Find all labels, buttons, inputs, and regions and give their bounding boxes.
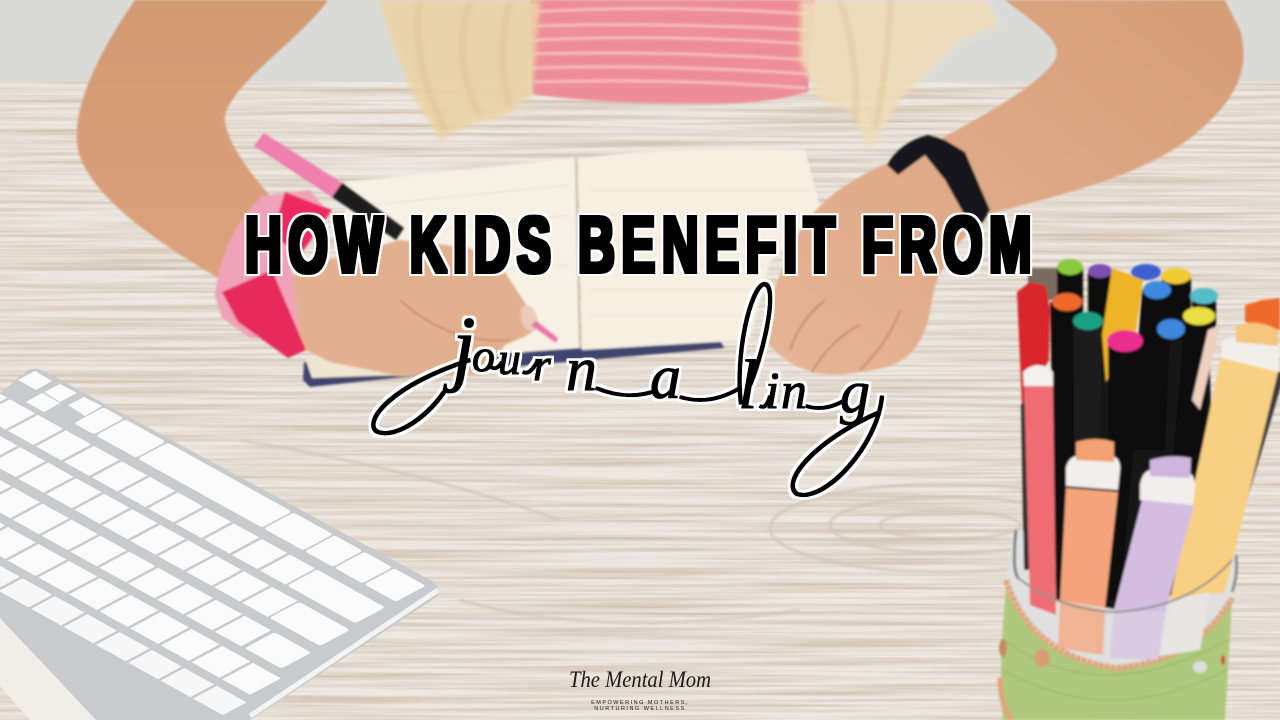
cup studs [999, 639, 1007, 657]
orange marker far right [1245, 298, 1280, 330]
journaling lettering: l [738, 347, 757, 424]
pale pen [1192, 325, 1220, 410]
cup glass rim [1018, 560, 1232, 612]
journaling lettering: g [840, 359, 870, 425]
notebook left page [345, 158, 579, 362]
swash on g [793, 396, 882, 495]
coral pen [1024, 385, 1056, 615]
logo: The Mental Mom: The Mental Mom [569, 667, 711, 692]
keyboard keys [0, 364, 445, 709]
journaling lettering: a [650, 344, 681, 412]
shirt [530, 0, 815, 104]
yellow highlighter [1170, 352, 1279, 600]
thin black pen [1215, 372, 1280, 590]
red marker [1017, 282, 1050, 405]
logo: The Mental Mom: EMPOWERING MOTHERS, [591, 700, 689, 706]
hair [378, 0, 1000, 150]
journaling lettering: o [472, 330, 495, 381]
keyboard body [0, 369, 438, 720]
marker cup [999, 259, 1280, 720]
journaling lettering: n [566, 336, 597, 404]
journaling lettering: n [781, 363, 807, 420]
wall background [0, 0, 1280, 90]
dark markers mass [1058, 330, 1215, 610]
swash on j [373, 360, 470, 433]
back markers [1028, 268, 1060, 300]
right arm and hand [765, 0, 1244, 375]
cup glass body [1006, 530, 1237, 668]
title: HOW KIDS BENEFIT FROM [245, 200, 1038, 290]
left arm [77, 0, 540, 376]
scrunchie [215, 190, 330, 340]
front marker tips [1130, 290, 1172, 450]
pink pen [254, 133, 558, 343]
keyboard arrow keys [18, 371, 102, 416]
journaling lettering: j [442, 300, 476, 394]
watch band [887, 135, 990, 225]
notebook right page [578, 149, 822, 350]
logo: The Mental Mom [569, 667, 711, 712]
logo: The Mental Mom: NURTURING WELLNESS [594, 706, 686, 712]
script subtitle: journaling [373, 284, 882, 495]
peach highlighter [1060, 488, 1118, 608]
notebook [303, 149, 822, 387]
letter connectors [490, 360, 845, 408]
keyboard [0, 364, 445, 720]
yellow flat marker [1102, 268, 1143, 382]
journaling lettering: i [765, 363, 779, 420]
journaling lettering: u [498, 333, 521, 384]
cup twine base [1001, 590, 1232, 720]
notebook cover edge [303, 340, 724, 387]
cup beaded rim [1006, 580, 1232, 668]
left hand [275, 240, 540, 376]
journaling lettering: r [533, 339, 552, 390]
swash on l [740, 284, 770, 404]
keyboard front strip [0, 618, 96, 720]
lavender highlighter [1114, 500, 1194, 612]
